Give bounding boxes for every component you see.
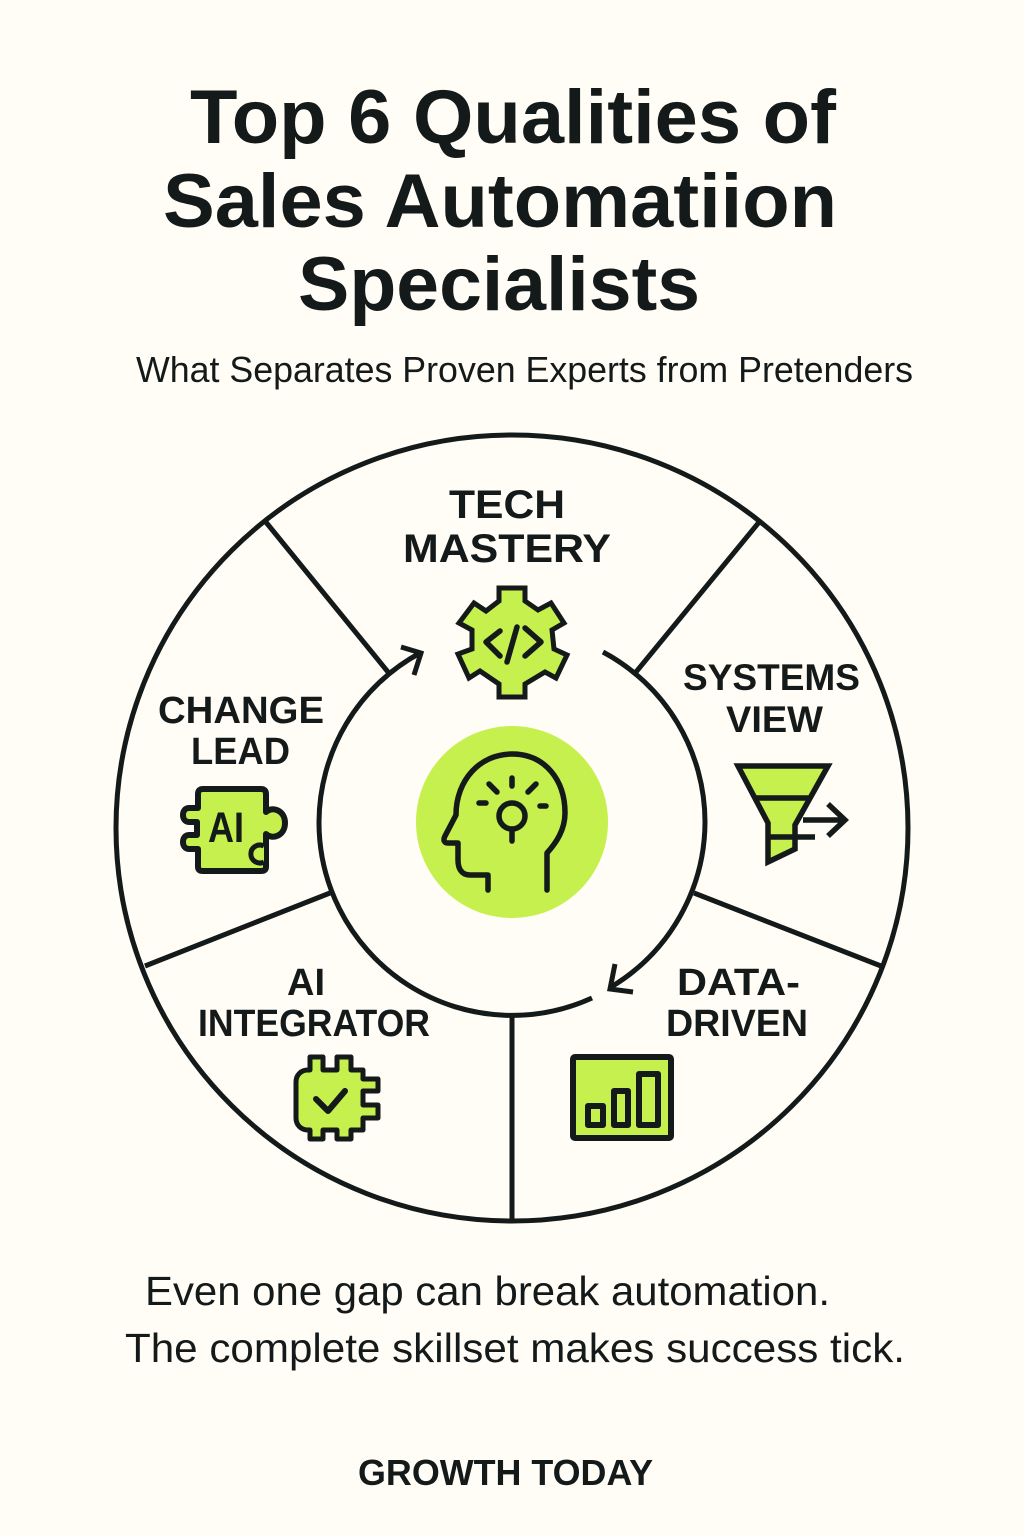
icon: bar chart (573, 1057, 671, 1138)
closing statement: Even one gap can break automation. (145, 1268, 830, 1314)
label: tech mastery: TECH (449, 483, 565, 527)
closing statement: The complete skillset makes success tick. (125, 1325, 905, 1371)
label: systems view: VIEW (726, 699, 823, 740)
icon: AI puzzle piece: AI (208, 804, 244, 852)
label: ai integrator: AI (287, 962, 325, 1004)
label: change lead: LEAD (191, 731, 290, 773)
closing statement (125, 1268, 905, 1371)
title: Sales Automatiion (163, 159, 837, 244)
brand footer: GROWTH TODAY (358, 1452, 653, 1493)
label: tech mastery: MASTERY (403, 527, 611, 571)
icon: gear with code brackets (458, 588, 567, 697)
icon: central head with light bulb (416, 726, 608, 918)
label: ai integrator (198, 962, 430, 1045)
label: change lead: CHANGE (158, 690, 324, 732)
label: data-driven (666, 962, 808, 1045)
label: systems view (683, 657, 860, 740)
icon: funnel with arrow (738, 766, 845, 862)
label: data-driven: DRIVEN (666, 1003, 808, 1045)
circular diagram (116, 435, 908, 1221)
label: ai integrator: INTEGRATOR (198, 1003, 430, 1045)
outer wheel with segment dividers (116, 435, 908, 1221)
title: Specialists (298, 242, 700, 327)
title: Top 6 Qualities of (190, 75, 837, 160)
label: tech mastery (403, 483, 611, 571)
icon: chip with check mark (296, 1057, 378, 1139)
label: data-driven: DATA- (677, 962, 800, 1004)
arrow: clockwise cycle, bottom to top left (319, 647, 592, 1015)
subtitle: What Separates Proven Experts from Pretenders (136, 349, 913, 390)
arrow: clockwise cycle, top right to bottom right (603, 652, 705, 992)
icon: AI puzzle piece (183, 789, 285, 871)
title (163, 75, 837, 327)
label: change lead (158, 690, 324, 773)
label: systems view: SYSTEMS (683, 657, 860, 698)
